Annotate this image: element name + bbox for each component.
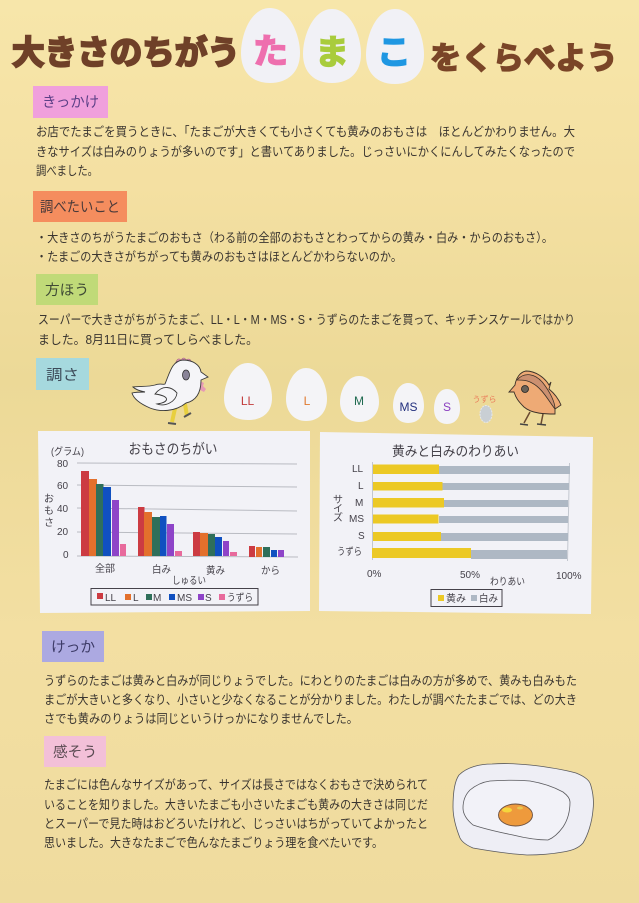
- title: [12, 8, 618, 84]
- panel: weight bar chart: [38, 431, 310, 613]
- egg: LL: LL: [241, 394, 254, 408]
- y axis labels: 0: [63, 550, 69, 561]
- text block: method: [38, 312, 575, 347]
- heading: きっかけ: [33, 86, 108, 118]
- egg: pink character: た: [253, 33, 288, 71]
- x axis labels: 全部: [95, 562, 115, 575]
- x axis labels: から: [261, 565, 280, 577]
- egg: blue character: こ: [377, 34, 411, 72]
- text block: reason: 調べました。: [36, 164, 98, 178]
- x axis labels: 50%: [460, 570, 480, 581]
- text block: impressions: 思いました。大きなたまごで色んなたまごりょう理を食べたいです。: [44, 835, 383, 850]
- egg: S: S: [443, 400, 451, 414]
- heading: けっか: けっか: [51, 639, 95, 656]
- size labels: イ: [333, 504, 343, 515]
- size labels: [333, 464, 365, 558]
- egg: LL: [224, 363, 272, 420]
- x axis labels: [95, 562, 280, 587]
- size labels: サ: [333, 494, 343, 506]
- ratio bars: yolk part: [372, 464, 471, 558]
- axis lines: [372, 462, 570, 561]
- legend: MS: [177, 593, 192, 604]
- size labels: LL: [352, 464, 364, 475]
- bars: 黄み: [193, 532, 237, 556]
- title text: right part: をくらべよう: [430, 41, 618, 76]
- text block: research items: [36, 230, 553, 264]
- y axis labels: さ: [44, 517, 54, 529]
- x axis labels: [367, 569, 582, 588]
- text block: result: うずらのたまごは黄みと白みが同じりょうでした。にわとりのたまごは白みの方が多めで、黄みも白みもた: [44, 673, 577, 688]
- text block: reason: きなサイズは白みのりょうが多いのです」と書いてありました。じっさいにかくにんしてみたくなったので: [36, 144, 575, 159]
- legend: [91, 588, 258, 605]
- heading: 調さ: [36, 358, 89, 390]
- heading: 方ほう: [36, 274, 98, 305]
- section: what to research: [33, 191, 553, 264]
- egg: green character: ま: [315, 34, 349, 72]
- chart title: 黄みと白みのわりあい: [392, 444, 519, 459]
- egg: pink character: [241, 8, 300, 83]
- text block: result: まごが大きいと多くなり、小さいと少なくなることが分かりました。わたしが調べたたまごでは、どの大き: [44, 692, 577, 707]
- y axis labels: 40: [57, 504, 69, 515]
- title text: left part: 大きさのちがう: [12, 34, 240, 71]
- x axis labels: 0%: [367, 569, 382, 580]
- heading: けっか: [42, 631, 104, 662]
- egg: MS: MS: [400, 400, 418, 414]
- egg: M: M: [354, 394, 364, 408]
- size labels: ズ: [333, 511, 343, 524]
- x axis labels: しゅるい: [172, 575, 206, 587]
- legend: M: [153, 593, 161, 604]
- ratio bars: white part: [439, 466, 570, 559]
- size labels: MS: [349, 514, 364, 525]
- text block: research items: ・大きさのちがうたまごのおもさ（わる前の全部のおもさとわってからの黄み・白み・からのおもさ）。: [36, 230, 553, 245]
- section: investigation: [36, 358, 561, 425]
- text block: reason: お店でたまごを買うときに、「たまごが大きくても小さくても黄みのおもさは ほとんどかわりません。大: [36, 124, 575, 139]
- heading: 調べたいこと: 調べたいこと: [40, 199, 120, 216]
- grid lines: [77, 463, 298, 557]
- egg: M: [340, 376, 379, 422]
- bars: 全部: [81, 471, 126, 556]
- y axis labels: お: [44, 493, 54, 505]
- bars: 白み: [138, 507, 182, 556]
- y axis labels: [44, 445, 84, 561]
- text block: impressions: いることを知りました。大きいたまごも小さいたまごも黄みの大きさは同じだ: [44, 797, 428, 812]
- y axis labels: 80: [57, 459, 69, 470]
- panel: yolk and white ratio chart: [319, 432, 593, 614]
- y axis labels: も: [44, 505, 54, 517]
- text block: reason: [36, 124, 575, 178]
- legend: 黄み: [446, 592, 466, 605]
- legend: 白み: [479, 592, 498, 605]
- legend: [431, 590, 502, 606]
- size labels: M: [355, 498, 363, 509]
- x axis labels: 黄み: [206, 564, 225, 577]
- text block: impressions: [44, 777, 428, 850]
- y axis labels: 60: [57, 481, 69, 492]
- egg: L: L: [304, 394, 311, 408]
- heading: 感そう: 感そう: [53, 744, 97, 761]
- legend: LL: [105, 593, 117, 604]
- heading: 方ほう: 方ほう: [45, 282, 89, 299]
- x axis labels: わりあい: [490, 576, 525, 588]
- icon: hen: [132, 358, 208, 424]
- heading: 調さ: 調さ: [46, 367, 79, 384]
- bars: から: [249, 546, 284, 557]
- text block: result: [44, 673, 577, 726]
- x axis labels: 白み: [152, 563, 171, 576]
- section: impressions: [44, 736, 593, 855]
- egg: green character: [303, 9, 361, 83]
- icon: fried egg on a plate: [453, 764, 593, 855]
- y axis labels: 20: [57, 527, 69, 538]
- section: reason: [33, 86, 575, 178]
- size labels: うずら: [337, 546, 362, 558]
- text block: result: さでも黄みのりょうは同じというけっかになりませんでした。: [44, 712, 358, 726]
- legend: S: [205, 593, 212, 604]
- text block: impressions: とスーパーで見た時はおどろいたけれど、じっさいはちがっていてよかったと: [44, 816, 428, 831]
- section: method: [36, 274, 575, 347]
- egg: quail: うずら: [472, 394, 496, 404]
- egg: quail: [472, 394, 496, 422]
- egg: L: [286, 368, 327, 421]
- x axis labels: 100%: [556, 571, 582, 582]
- egg: MS: [393, 383, 424, 423]
- heading: きっかけ: きっかけ: [42, 94, 99, 111]
- size labels: L: [358, 481, 364, 492]
- heading: 調べたいこと: [33, 191, 127, 222]
- chart title: おもさのちがい: [128, 441, 218, 457]
- heading: 感そう: [44, 736, 106, 767]
- section: result: [42, 631, 577, 726]
- egg: S: [434, 389, 460, 424]
- text block: method: ました。8月11日に買ってしらべました。: [38, 333, 258, 347]
- icon: chick: [509, 371, 561, 425]
- text block: impressions: たまごには色んなサイズがあって、サイズは長さではなくおもさで決められて: [44, 777, 428, 792]
- text block: method: スーパーで大きさがちがうたまご、LL・L・M・MS・S・うずらのたまごを買って、キッチンスケールではかり: [38, 312, 575, 327]
- text block: research items: ・たまごの大きさがちがっても黄みのおもさはほとんどかわらないのか。: [36, 249, 402, 264]
- size labels: S: [358, 531, 365, 542]
- egg: blue character: [366, 9, 424, 84]
- legend: L: [133, 593, 139, 604]
- legend: うずら: [227, 592, 253, 604]
- y axis labels: (グラム): [51, 445, 84, 458]
